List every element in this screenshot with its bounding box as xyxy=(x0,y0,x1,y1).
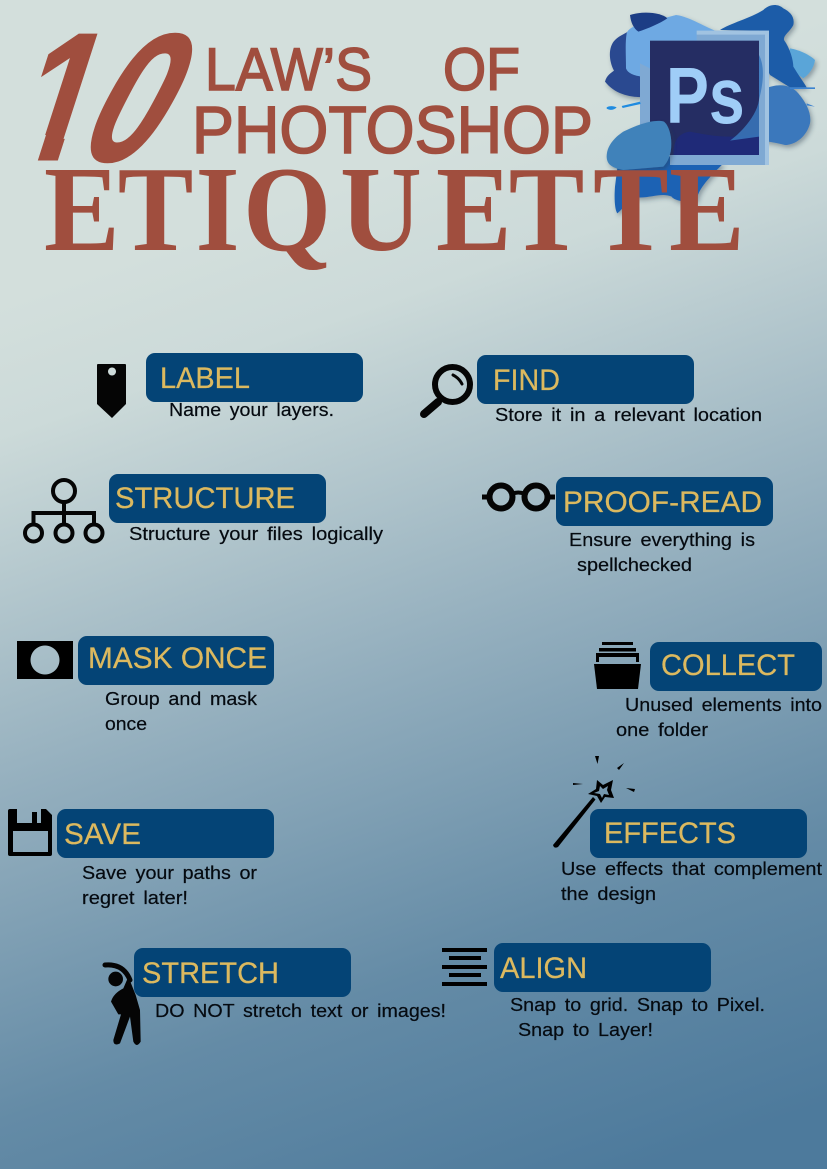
save description: Save your paths or xyxy=(82,862,257,883)
logo outer frame xyxy=(640,31,769,165)
title xyxy=(38,32,739,270)
stretch button xyxy=(134,948,351,997)
title line LAW'S OF: LAW’S xyxy=(205,36,372,103)
item: proof-read: PROOF-READ xyxy=(563,486,762,519)
structure button xyxy=(109,474,326,523)
structure description: Structure your files logically xyxy=(129,523,384,544)
collect button xyxy=(650,642,822,691)
item: align: ALIGN xyxy=(500,952,587,985)
title word ETIQUETTE: ETIQUETTE xyxy=(44,142,745,277)
title number 10: 0 xyxy=(60,0,218,201)
save description xyxy=(82,862,257,908)
icon: glasses xyxy=(482,486,555,508)
title number 10: 1 xyxy=(5,0,118,199)
proof-read button xyxy=(556,477,773,526)
stretch description: DO NOT stretch text or images! xyxy=(155,1000,446,1021)
item: mask once: MASK ONCE xyxy=(88,642,267,675)
icon: tag xyxy=(97,364,126,418)
effects description xyxy=(561,858,822,904)
icon: hierarchy xyxy=(25,480,102,542)
collect description: Unused elements into xyxy=(625,694,822,715)
collect description: one folder xyxy=(616,719,708,740)
effects button xyxy=(590,809,807,858)
item: align xyxy=(442,943,765,1040)
title line PHOTOSHOP: PHOTOSHOP xyxy=(192,93,593,168)
align description: Snap to Layer! xyxy=(518,1019,653,1040)
label button xyxy=(146,353,363,402)
effects description: Use effects that complement xyxy=(561,858,822,879)
effects description: the design xyxy=(561,883,656,904)
item: save xyxy=(8,809,274,908)
item: stretch: STRETCH xyxy=(142,957,279,990)
item: stretch xyxy=(105,948,446,1045)
save description: regret later! xyxy=(82,887,188,908)
title line LAW'S OF xyxy=(205,36,520,103)
mask once button xyxy=(78,636,274,685)
proof-read description: spellchecked xyxy=(577,554,692,575)
proof-read description xyxy=(569,529,755,575)
splash over the logo xyxy=(607,121,671,170)
item: structure: STRUCTURE xyxy=(115,482,295,515)
icon: magic wand xyxy=(553,756,635,848)
proof-read description: Ensure everything is xyxy=(569,529,755,550)
save button xyxy=(57,809,274,858)
item: collect: COLLECT xyxy=(661,649,795,682)
logo letters Ps: Ps xyxy=(666,51,745,140)
icon: stretching figure xyxy=(105,965,141,1045)
item: label xyxy=(97,353,363,420)
mask once description: Group and mask xyxy=(105,688,258,709)
mask once description: once xyxy=(105,713,147,734)
align description: Snap to grid. Snap to Pixel. xyxy=(510,994,765,1015)
title line LAW'S OF: OF xyxy=(443,36,520,103)
item: collect xyxy=(594,642,822,740)
find description: Store it in a relevant location xyxy=(495,404,762,425)
icon: floppy disk xyxy=(8,809,52,856)
item: structure xyxy=(25,474,384,544)
logo dark square xyxy=(650,41,759,155)
icon: align lines xyxy=(442,948,487,986)
item: effects xyxy=(553,756,822,904)
item: effects: EFFECTS xyxy=(604,817,736,850)
icon: mask xyxy=(17,641,73,679)
item: save: SAVE xyxy=(64,818,141,851)
item: proof-read xyxy=(482,477,773,575)
icon: stacked folders xyxy=(594,642,641,689)
item: find xyxy=(424,355,762,425)
title number 10 xyxy=(38,32,192,164)
item: find: FIND xyxy=(493,364,560,397)
collect description xyxy=(616,694,822,740)
item: label: LABEL xyxy=(160,362,250,395)
align button xyxy=(494,943,711,992)
align description xyxy=(510,994,765,1040)
icon: magnifier xyxy=(424,367,470,414)
label description: Name your layers. xyxy=(169,399,334,420)
item: mask once xyxy=(17,636,274,734)
icon: Photoshop logo with paint splash xyxy=(605,5,815,213)
mask once description xyxy=(105,688,258,734)
find button xyxy=(477,355,694,404)
